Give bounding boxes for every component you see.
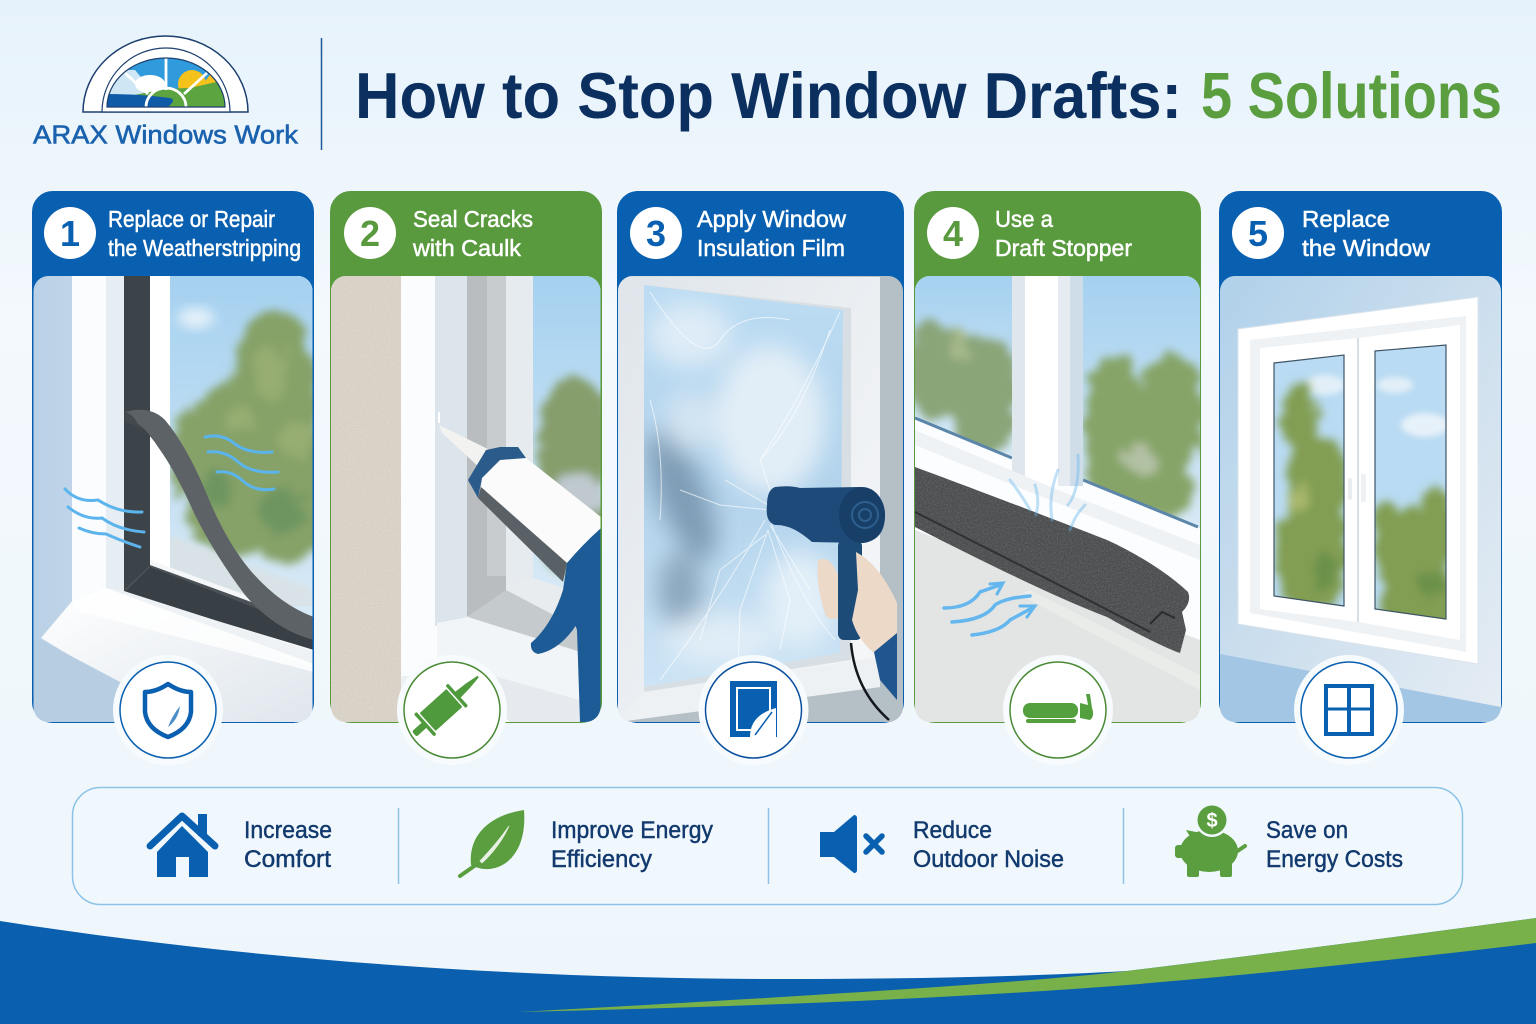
card 5 background — [1220, 192, 1501, 722]
benefit: improve energy efficiency: Efficiency — [551, 846, 652, 873]
number badge 3: 3 — [646, 213, 666, 254]
number badge 5 — [1232, 207, 1284, 259]
label: increase comfort: Increase — [244, 817, 332, 844]
benefit: reduce outdoor noise — [820, 815, 1064, 873]
panel: step 5 replace window — [1220, 192, 1502, 722]
footer wave — [0, 918, 1536, 1024]
heading 5: the Window — [1302, 235, 1430, 261]
icon: leaf — [460, 810, 524, 876]
card 2 background — [331, 192, 601, 722]
card 4 background — [915, 192, 1200, 722]
number badge 3 — [630, 207, 682, 259]
number badge 2 — [344, 207, 396, 259]
benefit: increase comfort — [150, 814, 332, 877]
icon: house — [150, 814, 215, 877]
number badge 1: 1 — [60, 213, 80, 254]
number badge 4 — [927, 207, 979, 259]
photo: draft stopper on sill — [905, 276, 1204, 722]
heading 2 — [412, 206, 533, 261]
heading 2: with Caulk — [412, 235, 521, 261]
hand — [818, 552, 897, 653]
icon: draft stopper — [1003, 655, 1113, 765]
label: reduce outdoor noise: Reduce — [913, 817, 992, 844]
icon: shield — [113, 655, 223, 765]
draft wind lines — [65, 436, 278, 547]
heat gun — [767, 486, 885, 640]
icon: window — [1294, 655, 1404, 765]
card 1 background — [33, 192, 313, 722]
heading 4: Draft Stopper — [995, 235, 1132, 261]
panel: benefits bar — [72, 788, 1462, 904]
benefit: reduce outdoor noise: Outdoor Noise — [913, 846, 1064, 873]
logo arch window — [83, 36, 248, 112]
caulk gun — [439, 425, 601, 722]
benefit: improve energy efficiency — [460, 810, 713, 876]
panel: step 2 caulk — [331, 192, 620, 722]
benefit: increase comfort: Comfort — [244, 846, 331, 873]
logo — [33, 36, 299, 150]
cord — [851, 643, 889, 720]
number badge 1 — [44, 207, 96, 259]
title: How to Stop Window Drafts: — [355, 59, 1182, 132]
heading 5 — [1302, 206, 1430, 261]
label: improve energy efficiency: Improve Energy — [551, 817, 713, 844]
sleeve — [874, 633, 897, 700]
heading 2: Seal Cracks — [413, 206, 533, 232]
photo: film and heat gun — [618, 276, 903, 722]
panel: step 1 weatherstripping — [33, 192, 340, 722]
heading 3 — [697, 206, 846, 261]
photo: new double window — [1220, 276, 1502, 722]
plastic film texture — [634, 292, 840, 680]
logo wordmark: ARAX Windows Work — [33, 120, 299, 150]
draft arrows — [944, 455, 1085, 635]
stopper roll — [915, 467, 1189, 653]
number badge 4: 4 — [943, 213, 963, 254]
icon: film on frame — [698, 655, 808, 765]
floor — [915, 530, 1200, 722]
label: save on energy costs: Save on — [1266, 817, 1348, 844]
icon: muted speaker — [820, 815, 882, 873]
heading 5: Replace — [1302, 206, 1390, 232]
heading 1: Replace or Repair — [108, 206, 275, 232]
icon: piggy bank with coin: $ — [1206, 810, 1218, 832]
icon: piggy bank with coin — [1175, 803, 1245, 877]
photo: caulk gun at window — [331, 276, 620, 722]
heading 3: Apply Window — [697, 206, 846, 232]
heading 4: Use a — [995, 206, 1053, 232]
photo: weatherstrip on window — [33, 276, 340, 722]
panel: step 4 draft stopper — [905, 192, 1204, 722]
panel: step 3 insulation film — [618, 192, 903, 722]
number badge 5: 5 — [1248, 213, 1268, 254]
icon: caulk tube — [397, 655, 507, 765]
number badge 2: 2 — [360, 213, 380, 254]
benefit: save on energy costs — [1175, 803, 1403, 877]
heading 1: the Weatherstripping — [108, 235, 301, 261]
heading 4 — [995, 206, 1132, 261]
heading 3: Insulation Film — [697, 235, 845, 261]
card 3 background — [618, 192, 903, 722]
heading 1 — [108, 206, 301, 261]
benefit: save on energy costs: Energy Costs — [1266, 846, 1403, 873]
